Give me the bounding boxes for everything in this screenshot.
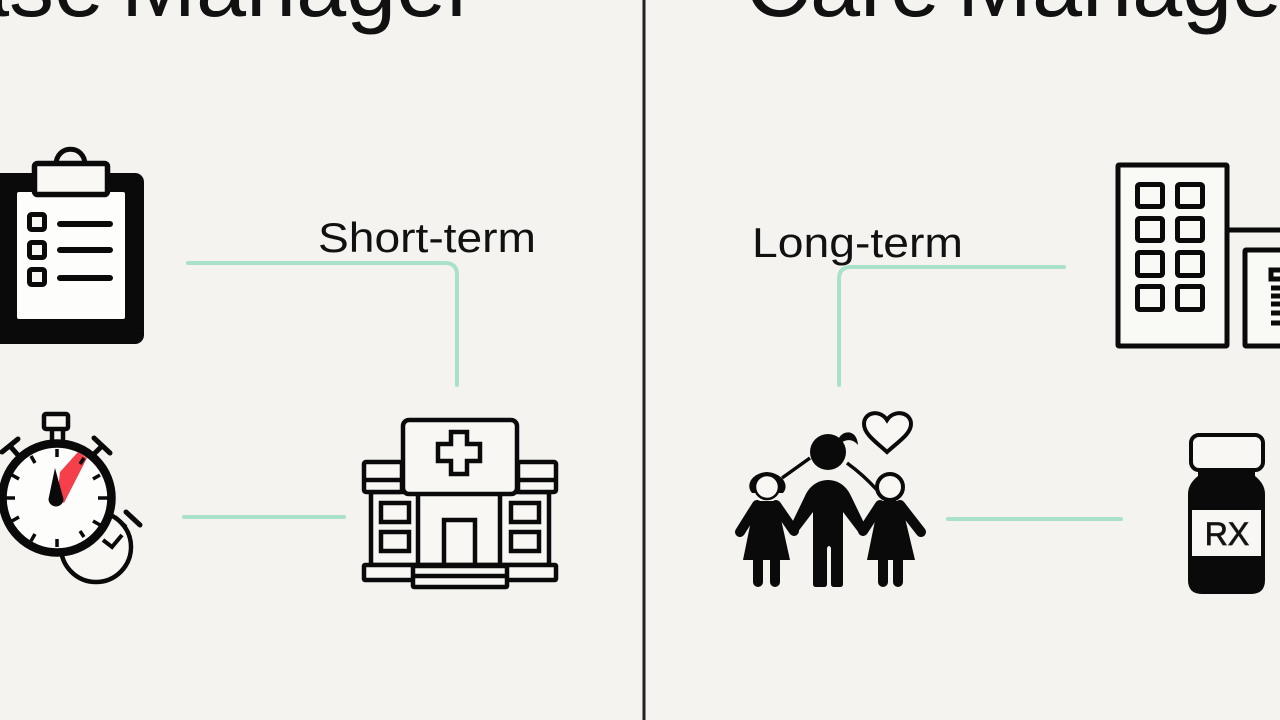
icon: prescription bottle: RX [1205,516,1249,552]
label: Short-term: Short-term [318,214,536,261]
label: Long-term: Long-term [752,219,963,266]
icon: office buildings [1118,165,1280,346]
icon: hospital building [364,420,556,587]
icon: clipboard checklist [0,149,144,344]
connector: long-term elbow [839,267,1064,385]
icon: stopwatch [2,414,140,582]
connector: short-term elbow [188,263,457,385]
connector: stopwatch to hospital [184,515,344,519]
icon: prescription bottle [1188,435,1265,594]
connector: family to prescription [948,517,1121,521]
icon: family with heart [740,413,921,587]
